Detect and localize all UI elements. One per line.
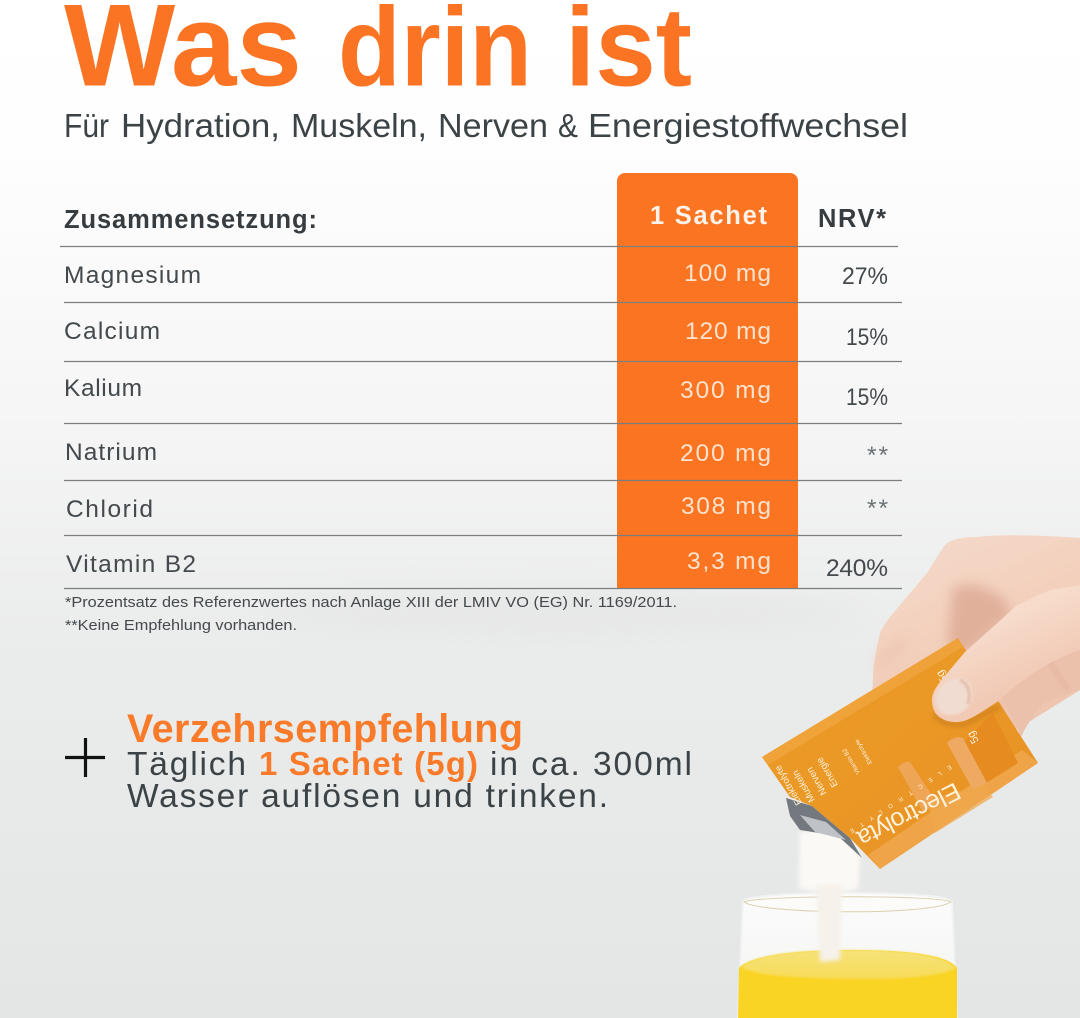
sachet fine print	[842, 737, 874, 775]
sachet fine print: Vitamin B2	[842, 746, 862, 775]
powder cloud	[799, 826, 860, 892]
hand: fingers and palm	[872, 535, 1080, 740]
glass rim	[744, 897, 951, 912]
footnotes	[65, 595, 677, 634]
sachet brand text: Electrolyta	[852, 777, 965, 852]
subtitle: Für	[64, 107, 109, 144]
row: Chlorid: **	[867, 495, 888, 522]
subtitle: Energiestoffwechsel	[588, 107, 908, 144]
sachet stripe two	[898, 762, 937, 812]
shading beside index finger	[877, 640, 905, 665]
table rules	[60, 246, 902, 588]
subtitle: &	[558, 107, 578, 144]
glass	[738, 893, 957, 1018]
row: Magnesium: 100 mg	[684, 260, 771, 287]
row: Chlorid: 308 mg	[681, 493, 771, 520]
sachet weight text upper: 5g	[934, 668, 951, 684]
row: Vitamin B2: Vitamin B2	[66, 551, 196, 578]
sachet small text: Energie	[815, 755, 841, 789]
sachet band	[927, 785, 993, 833]
orange sachet column	[617, 173, 798, 588]
row: Magnesium: 27%	[842, 263, 888, 290]
dosage instructions: Täglich	[127, 746, 246, 783]
liquid foam	[741, 950, 955, 979]
sachet weight text lower: 5g	[965, 729, 982, 746]
row: Kalium: 15%	[846, 384, 888, 411]
row: Calcium: Calcium	[64, 318, 160, 345]
row: Chlorid: Chlorid	[66, 496, 153, 523]
shading in the crook between finger and thumb	[948, 585, 1012, 655]
row: Vitamin B2: 3,3 mg	[687, 548, 771, 575]
footnotes: **Keine Empfehlung vorhanden.	[65, 618, 297, 634]
row: Calcium: 15%	[846, 324, 888, 351]
row: Magnesium	[64, 260, 888, 290]
row: Natrium: **	[867, 442, 888, 469]
powder falling stem	[816, 885, 842, 962]
sachet	[762, 638, 1038, 869]
row: Calcium	[64, 318, 888, 351]
sachet spaced text: ELECTROLYTE	[848, 763, 952, 834]
dosage instructions	[127, 745, 692, 815]
hand: thumb	[932, 585, 1080, 722]
subtitle	[64, 107, 908, 144]
sachet fine print: Elektrolyte	[854, 737, 874, 765]
dosage instructions: Wasser auflösen und trinken.	[127, 778, 608, 815]
heading: Verzehrsempfehlung: Verzehrsempfehlung	[127, 707, 523, 751]
sachet top seam	[762, 638, 963, 765]
table header: Zusammensetzung:	[64, 206, 317, 234]
hand: lower palm below thumb	[1000, 640, 1080, 737]
row: Kalium: 300 mg	[680, 377, 771, 404]
glass body	[738, 893, 957, 1018]
subtitle: Muskeln,	[291, 107, 427, 144]
sachet body	[762, 638, 1038, 869]
sachet bottom seam	[868, 750, 1038, 869]
table header	[64, 202, 886, 234]
sachet small text: Muskeln	[790, 768, 818, 804]
sachet small text: Elektrolyte	[773, 763, 805, 807]
row: Natrium	[65, 439, 888, 469]
row: Kalium	[64, 375, 888, 411]
crease on lower palm	[1047, 657, 1068, 690]
row: Vitamin B2: 240%	[826, 555, 888, 582]
icon: plus	[65, 738, 105, 777]
sachet small text	[773, 755, 841, 807]
row: Natrium: 200 mg	[680, 440, 771, 467]
thumbnail	[936, 678, 973, 715]
table header: 1 Sachet	[650, 202, 768, 230]
illustration: hand pouring sachet into glass	[738, 535, 1080, 1018]
table header: NRV*	[818, 205, 886, 233]
footnotes: *Prozentsatz des Referenzwertes nach Anlage XIII der LMIV VO (EG) Nr. 1169/2011.	[65, 595, 677, 611]
row: Kalium: Kalium	[64, 375, 142, 402]
powder stream	[799, 826, 860, 962]
row: Calcium: 120 mg	[685, 318, 771, 345]
dosage instructions: in ca. 300ml	[490, 746, 692, 783]
subtitle: Nerven	[438, 107, 548, 144]
dosage instructions: 1 Sachet (5g)	[259, 745, 478, 782]
sachet window	[963, 713, 1018, 785]
row: Natrium: Natrium	[65, 439, 157, 466]
row: Magnesium: Magnesium	[64, 262, 201, 289]
row: Chlorid	[66, 493, 888, 523]
sachet stripe one	[947, 737, 987, 790]
panel: nutrition table	[60, 173, 902, 588]
sachet small text: Nerven	[805, 765, 830, 797]
shadow under thumb	[934, 706, 1000, 725]
title	[64, 0, 692, 110]
row: Vitamin B2	[66, 548, 888, 582]
sachet torn silver opening	[786, 798, 862, 858]
liquid	[738, 950, 957, 1018]
subtitle: Hydration,	[121, 107, 280, 144]
